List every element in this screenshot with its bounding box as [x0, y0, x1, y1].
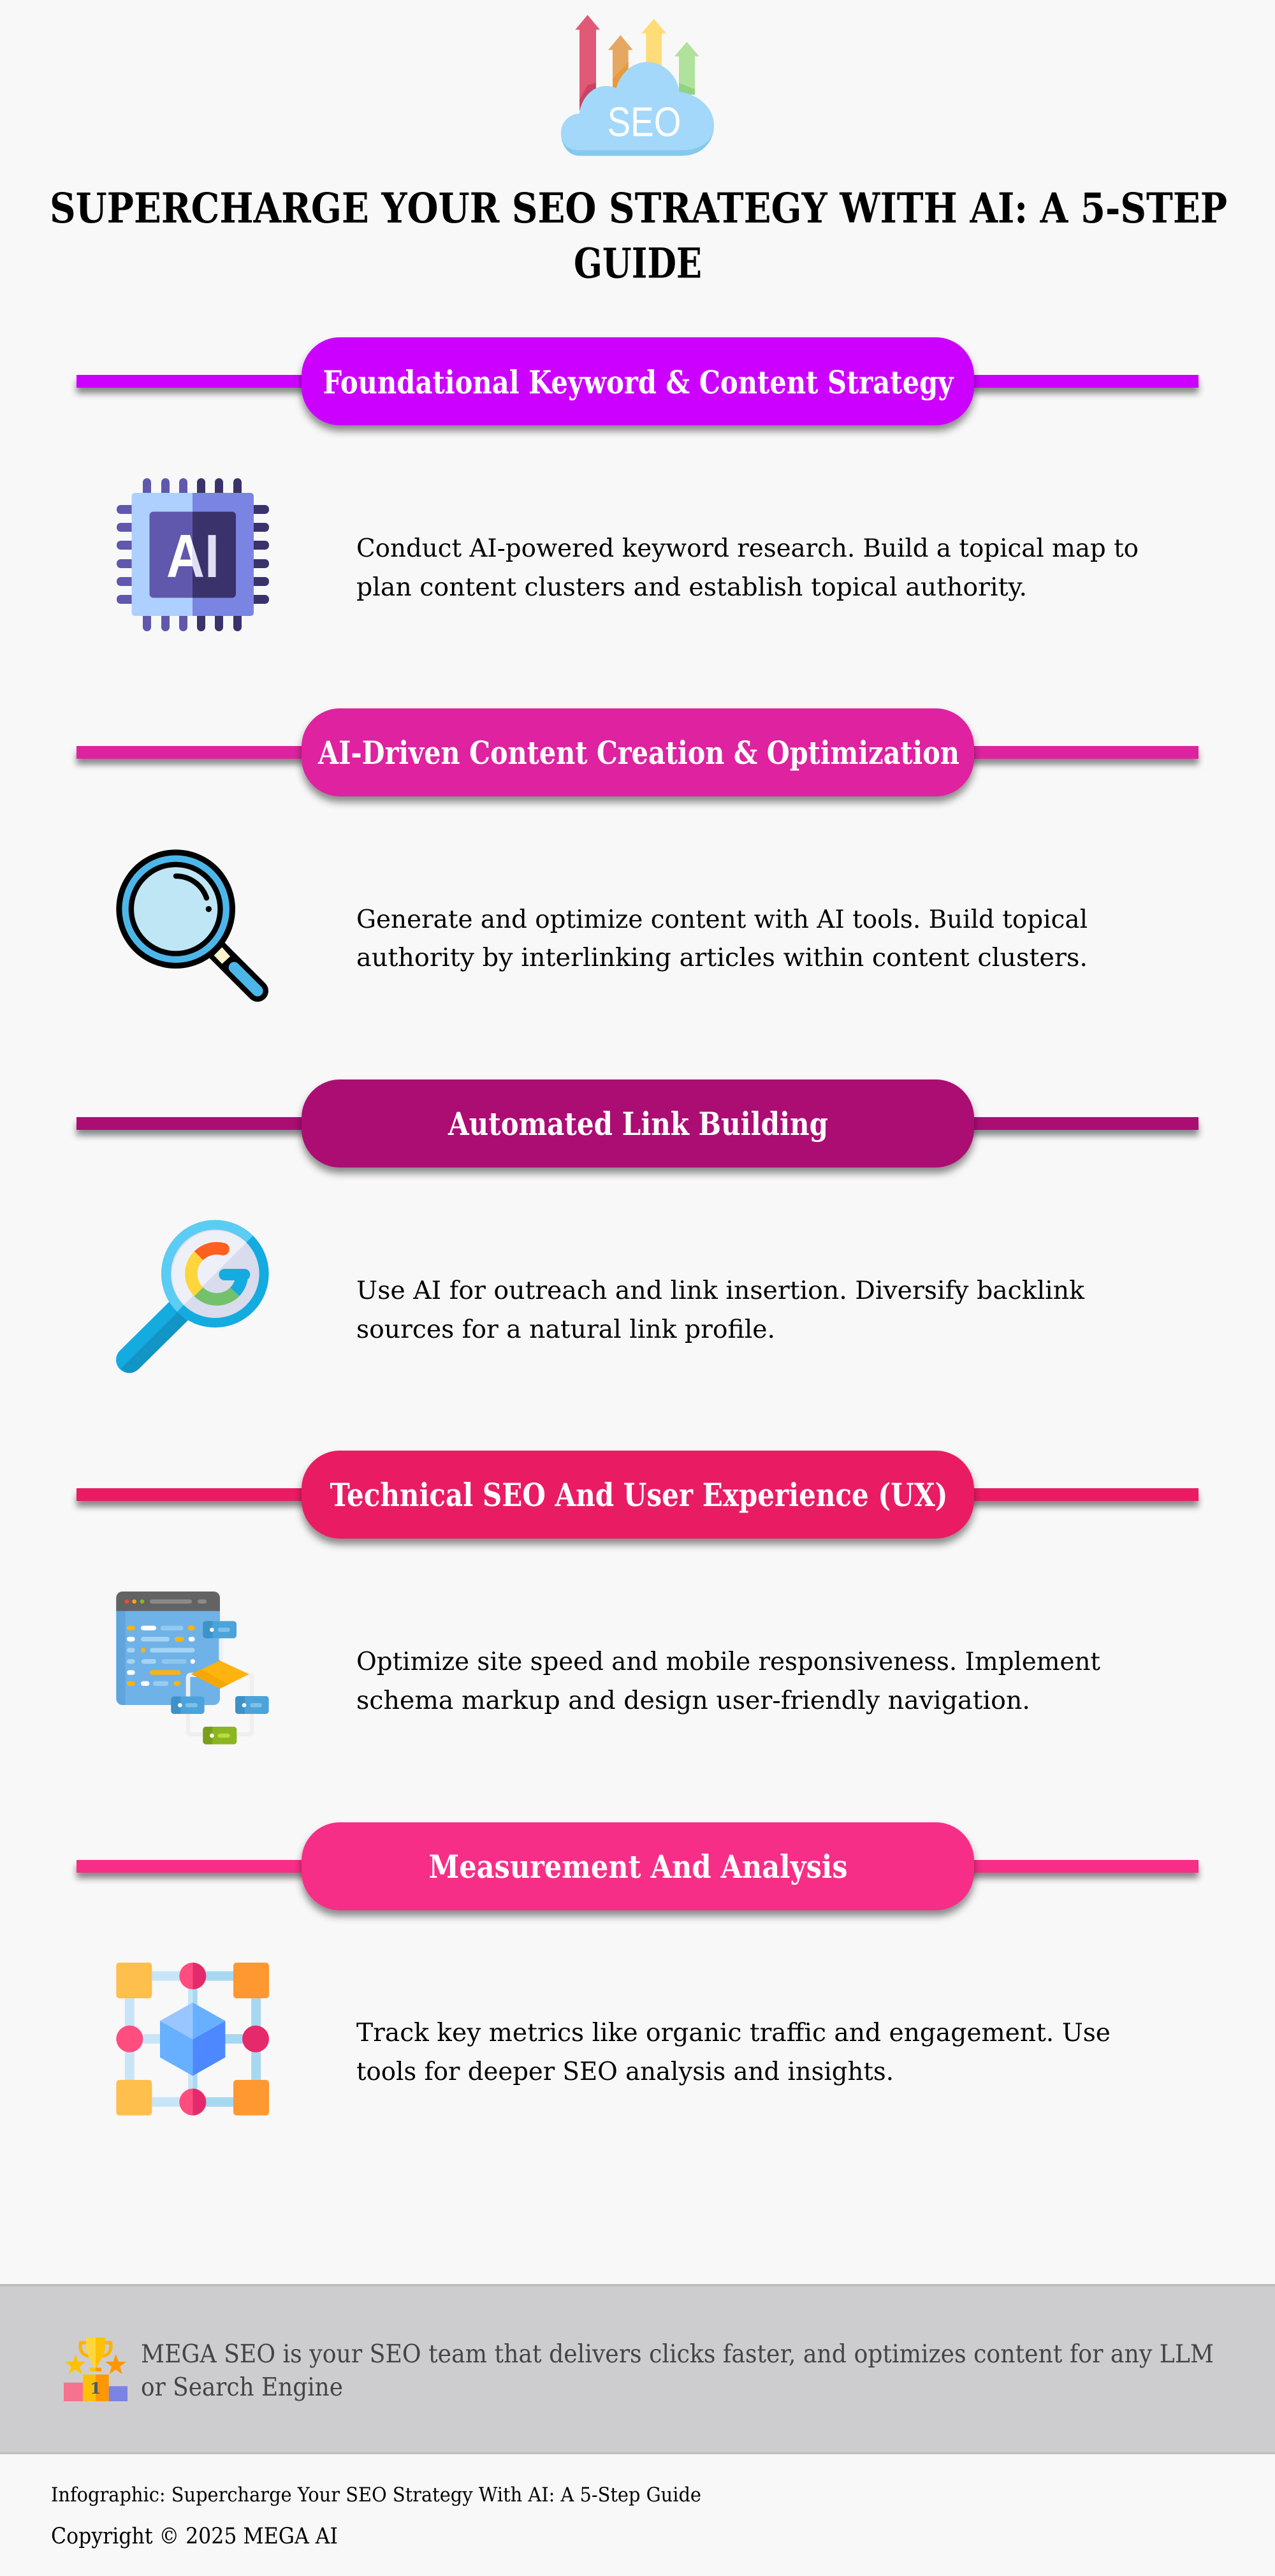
- text: step 1 description: plan content clusters and establish topical authority.: [356, 573, 1027, 602]
- text: step 4 description: Optimize site speed and mobile responsiveness. Implement: [356, 1648, 1100, 1676]
- text: step 3 description: sources for a natural link profile.: [356, 1315, 775, 1344]
- footer: copyright: Copyright © 2025 MEGA AI: [51, 2524, 338, 2549]
- text: step 4 description: schema markup and design user-friendly navigation.: [356, 1687, 1030, 1715]
- panel: step 2: [76, 708, 1198, 991]
- text: promo message: MEGA SEO is your SEO team that delivers clicks faster, and optimizes content for any LLM: [141, 2340, 1214, 2369]
- icon: AI chip: AI: [166, 522, 219, 590]
- icon: trophy podium: 1: [90, 2379, 101, 2397]
- heading: step 2: [302, 708, 974, 796]
- title: [50, 184, 1227, 288]
- title: GUIDE: [574, 240, 702, 288]
- text: step 3 description: Use AI for outreach and link insertion. Diversify backlink: [356, 1277, 1084, 1305]
- panel: step 4: [76, 1451, 1198, 1745]
- text: step 2 description: authority by interlinking articles within content clusters.: [356, 944, 1088, 972]
- heading: step 3: Automated Link Building: [448, 1105, 828, 1143]
- panel: MEGA SEO promo band: [0, 2284, 1275, 2454]
- text: promo message: [141, 2340, 1214, 2402]
- text: step 2 description: [356, 905, 1088, 972]
- icon: AI chip: [117, 478, 269, 631]
- heading: step 1: [302, 337, 974, 425]
- heading: step 2: AI-Driven Content Creation & Optimization: [317, 734, 959, 772]
- icon: magnifying glass: [116, 849, 258, 991]
- heading: step 1: Foundational Keyword & Content Strategy: [323, 363, 954, 401]
- text: step 2 description: Generate and optimize content with AI tools. Build topical: [356, 905, 1088, 934]
- text: step 5 description: Track key metrics like organic traffic and engagement. Use: [356, 2019, 1111, 2047]
- panel: step 5: [76, 1822, 1198, 2116]
- heading: step 4: Technical SEO And User Experience (UX): [330, 1476, 947, 1514]
- icon: site structure window: [116, 1592, 269, 1745]
- heading: step 3: [302, 1079, 974, 1167]
- panel: step 3: [76, 1079, 1198, 1373]
- text: promo message: or Search Engine: [141, 2373, 343, 2402]
- icon: Google magnifier: [120, 1220, 269, 1373]
- icon: network cube: [116, 1963, 269, 2116]
- heading: step 4: [302, 1451, 974, 1539]
- panel: step 1: [76, 337, 1198, 631]
- icon: SEO cloud with rising arrows: [561, 15, 714, 156]
- text: step 5 description: [356, 2019, 1111, 2086]
- text: step 3 description: [356, 1277, 1084, 1344]
- heading: step 5: [302, 1822, 974, 1910]
- icon: trophy podium: [64, 2338, 127, 2401]
- heading: step 5: Measurement And Analysis: [428, 1848, 848, 1885]
- text: step 5 description: tools for deeper SEO analysis and insights.: [356, 2058, 894, 2086]
- text: step 4 description: [356, 1648, 1100, 1715]
- icon: SEO cloud with rising arrows: SEO: [608, 98, 681, 145]
- text: step 1 description: [356, 534, 1139, 602]
- footer: source line: Infographic: Supercharge Your SEO Strategy With AI: A 5-Step Guide: [51, 2484, 701, 2506]
- text: step 1 description: Conduct AI-powered keyword research. Build a topical map to: [356, 534, 1139, 563]
